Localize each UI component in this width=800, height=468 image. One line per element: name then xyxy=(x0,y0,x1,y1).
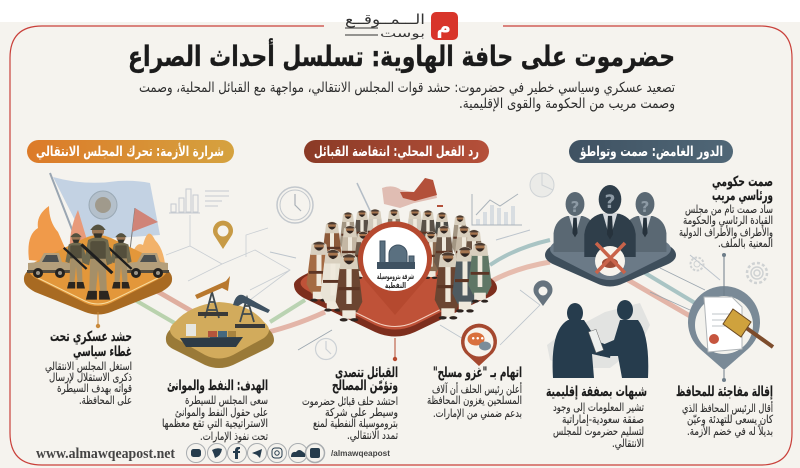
panel: silence illustration xyxy=(545,185,676,286)
icon: small clock xyxy=(316,338,336,360)
text block: oil target: تحت نفوذ الإمارات. xyxy=(200,430,268,444)
text block: oil target: سعى المجلس للسيطرة xyxy=(185,394,268,408)
text block: military build-up: حشد عسكري تحت xyxy=(50,329,132,346)
text block: military build-up: ذكرى الاستقلال لإرسال xyxy=(49,371,132,385)
icon: gavel and decree pin xyxy=(688,253,773,382)
panel: silence illustration: ? xyxy=(571,198,579,216)
text block: regional deal: تشير المعلومات إلى وجود xyxy=(553,401,644,415)
icon: line chart xyxy=(472,194,522,225)
background network lines and roads xyxy=(135,183,720,350)
panel: tribes illustration xyxy=(294,178,497,361)
text block: tribes xyxy=(302,365,398,442)
footer website: www.almawqeapost.net xyxy=(36,446,175,462)
text block: tribes: بتروموسيلة النفطية لمنع xyxy=(313,417,398,431)
footer handle: /almawqeapost xyxy=(331,448,390,458)
icon: gear small xyxy=(690,258,704,270)
subtitle: وصمت مريب من الحكومة والقوى الإقليمية. xyxy=(459,96,675,112)
icon: bar chart left xyxy=(169,189,229,213)
text block: armed invasion xyxy=(427,365,522,421)
icon: gold location pin xyxy=(213,221,233,249)
icon: speech bubble pin: ••• xyxy=(471,335,484,343)
text block: tribes: القبائل تتصدى xyxy=(335,365,398,381)
footer social icons xyxy=(186,444,324,462)
text block: armed invasion: أعلن رئيس الحلف أن آلاف xyxy=(432,382,522,397)
logo: الـــمــوقــع xyxy=(345,12,425,28)
text block: regional deal: الانتقالي. xyxy=(612,437,644,450)
logo: بوست xyxy=(380,27,425,40)
icon: slate location pin xyxy=(534,280,552,306)
icon: refinery location pin: النفطية xyxy=(385,281,406,290)
text block: oil target xyxy=(162,378,268,444)
pill: local reaction: رد الفعل المحلي: انتفاضة القبائل xyxy=(314,144,479,160)
pill: ambiguous role xyxy=(569,140,733,163)
text block: military build-up: غطاء سياسي xyxy=(73,344,132,360)
text block: oil target: على حقول النفط والموانئ xyxy=(175,406,268,420)
panel: military illustration xyxy=(24,173,172,328)
panel: handshake illustration xyxy=(547,300,650,378)
panel: silence illustration: ? xyxy=(604,191,616,213)
text block: regional deal: شبهات بصفقة إقليمية xyxy=(546,384,647,400)
text block: military build-up: استغل المجلس الانتقالي xyxy=(45,360,132,374)
text block: tribes: وسيطر على شركة xyxy=(325,406,398,420)
text block: armed invasion: بدعم ضمني من الإمارات. xyxy=(433,407,522,421)
text block: tribes: تمدد الانتقالي. xyxy=(347,429,398,442)
panel: silence illustration: ? xyxy=(641,198,649,216)
icon: Yemen map xyxy=(382,178,443,208)
text block: tribes: وتؤمّن المصالح xyxy=(332,378,398,394)
text block: silence: ساد صمت تام من مجلس xyxy=(685,203,773,217)
icon: refinery location pin: شرفة بتروموسيلة xyxy=(377,272,414,281)
pill: ambiguous role: الدور الغامض: صمت وتواطؤ xyxy=(579,144,723,160)
text block: oil target: الاستراتيجية التي تقع معظمها xyxy=(162,417,268,431)
text block: governor dismissal: كان يسعى للتهدئة وعيّن xyxy=(687,413,774,427)
logo: م xyxy=(436,14,451,38)
text block: armed invasion: اتهام بـ "غزو مسلح" xyxy=(433,365,522,381)
text block: regional deal xyxy=(546,384,647,450)
text block: oil target: الهدف: النفط والموانئ xyxy=(167,378,268,394)
text block: silence: القيادة الرئاسي والحكومة xyxy=(683,214,773,228)
subtitle xyxy=(139,80,675,112)
text block: governor dismissal: بديلاً له في خضم الأزمة. xyxy=(687,423,773,439)
text block: silence: المعنية بالملف. xyxy=(718,237,773,250)
text block: governor dismissal xyxy=(676,384,774,439)
icon: pie chart xyxy=(530,173,554,197)
text block: regional deal: لتسليم حضرموت للمجلس xyxy=(553,425,644,439)
text block: silence xyxy=(679,174,773,250)
logo xyxy=(345,12,458,40)
pill: crisis spark: شرارة الأزمة: تحرك المجلس الانتقالي xyxy=(36,143,224,160)
icon: clock xyxy=(277,187,313,223)
pill: local reaction xyxy=(304,140,489,163)
text block: military build-up: على المحافظة. xyxy=(79,394,132,407)
pill: crisis spark xyxy=(27,140,234,163)
icon: refinery location pin xyxy=(358,221,432,315)
text block: tribes: احتشد حلف قبائل حضرموت xyxy=(302,395,398,409)
icon: gear large xyxy=(747,263,767,283)
panel: oil and ports illustration xyxy=(166,276,274,368)
text block: military build-up xyxy=(45,329,132,407)
text block: regional deal: صفقة سعودية-إماراتية xyxy=(562,413,644,427)
icon: speech bubble pin xyxy=(461,324,497,366)
text block: military build-up: قواته بهدف السيطرة xyxy=(57,382,132,396)
text block: armed invasion: المسلحين يغزون المحافظة xyxy=(427,394,522,408)
subtitle: تصعيد عسكري وسياسي خطير في حضرموت: حشد قوات المجلس الانتقالي، مواجهة مع القبائل المحلية، وصمت xyxy=(139,80,675,96)
